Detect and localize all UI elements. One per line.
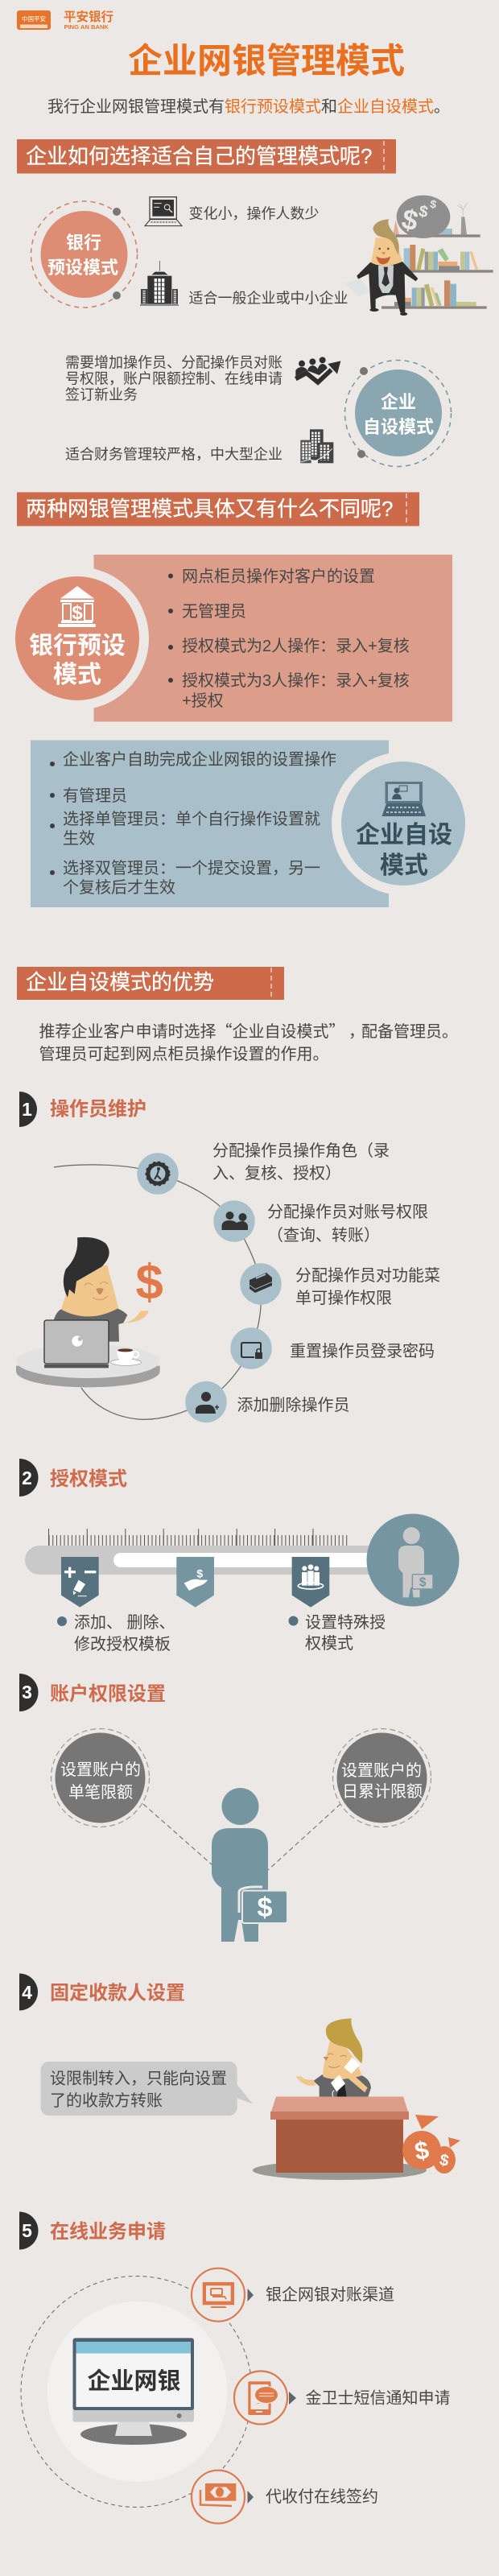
icon: person in circle: $ xyxy=(419,1575,427,1589)
service: collection and payment signing: 代收付在线签约 xyxy=(266,2487,378,2506)
icon: person with briefcase: $ xyxy=(258,1893,273,1923)
heading 3: account limits: 账户权限设置 xyxy=(50,1683,166,1705)
label: bank preset xyxy=(29,633,126,688)
list: bank preset features: +授权 xyxy=(182,691,224,710)
label: bank preset: 银行预设 xyxy=(29,633,126,659)
service: SMS notification xyxy=(234,2372,451,2425)
icon: office tower xyxy=(140,261,179,305)
list: bank preset features xyxy=(168,567,410,710)
step: assign roles: 分配操作员操作角色（录 xyxy=(212,1141,390,1160)
logo: Ping An Bank: PING AN BANK xyxy=(64,23,109,31)
text: manage more operators: 签订新业务 xyxy=(65,386,138,402)
text: special authorization xyxy=(288,1613,386,1653)
shield: hand with money: $ xyxy=(196,1567,203,1579)
text: recommendation: ， xyxy=(348,1023,365,1041)
banner: differences xyxy=(17,493,419,526)
text: special authorization: 权模式 xyxy=(305,1634,353,1653)
panel: bank preset mode xyxy=(0,555,452,722)
subtitle: 我行企业网银管理模式有银行预设模式和企业自设模式。 xyxy=(47,97,450,116)
icon: bank building xyxy=(58,586,96,627)
light circle xyxy=(47,2301,227,2482)
service: SMS notification: 金卫士短信通知申请 xyxy=(306,2389,451,2407)
panel: corporate self-set badge xyxy=(344,361,451,467)
text: strict finance: 适合财务管理较严格，中大型企业 xyxy=(65,446,282,462)
shield: edit template xyxy=(61,1557,99,1608)
list: corporate features: 个复核后才生效 xyxy=(63,878,175,897)
icon: team and rising arrow xyxy=(295,357,340,382)
bubble: single limit xyxy=(52,1729,150,1827)
heading 2: authorization mode: 2 xyxy=(22,1468,32,1488)
heading 1: operator maintenance: 1 xyxy=(22,1099,32,1120)
step: menu permissions: 分配操作员对功能菜 xyxy=(295,1266,440,1285)
label: corporate self-set: 企业自设 xyxy=(356,822,452,848)
list: bank preset features: 授权模式为3人操作：录入+复核 xyxy=(182,671,410,690)
step: assign roles xyxy=(137,1141,390,1195)
step: menu permissions xyxy=(240,1263,440,1307)
step: add or delete operators: 添加删除操作员 xyxy=(237,1396,349,1414)
label: bank preset: 模式 xyxy=(53,662,101,688)
banner: differences: 两种网银管理模式具体又有什么不同呢? xyxy=(26,497,393,521)
label: corporate self-set: 模式 xyxy=(380,852,428,879)
text: recommendation: 配备管理员。 xyxy=(361,1022,458,1041)
logo: Ping An Bank: 平安银行 xyxy=(64,10,113,24)
panel: corporate self-set badge: 自设模式 xyxy=(363,417,434,437)
bubble: daily limit: 设置账户的 xyxy=(341,1761,422,1780)
illustration: man with bookshelves xyxy=(344,196,493,316)
text: edit templates: 修改授权模板 xyxy=(74,1635,171,1653)
banner: advantages: 企业自设模式的优势 xyxy=(26,970,214,994)
heading 4: fixed payee: 4 xyxy=(22,1982,32,2003)
bubble: single limit: 设置账户的 xyxy=(60,1761,141,1779)
banner: advantages xyxy=(17,967,284,1000)
text: edit templates: 添加、 删除、 xyxy=(74,1613,175,1632)
heading 4: fixed payee xyxy=(19,1974,185,2011)
panel: corporate self-set mode xyxy=(31,740,499,908)
label: corporate self-set xyxy=(356,822,452,879)
list: bank preset features: 网点柜员操作对客户的设置 xyxy=(182,567,375,586)
illustration: man at laptop: $ xyxy=(136,1254,163,1310)
banner: how to choose: 企业如何选择适合自己的管理模式呢? xyxy=(26,144,372,168)
callout: fixed payee: 了的收款方转账 xyxy=(50,2091,163,2110)
bubble: daily limit xyxy=(333,1729,431,1827)
heading 2: authorization mode: 授权模式 xyxy=(50,1468,127,1490)
service: reconciliation channel: 银企网银对账渠道 xyxy=(266,2285,394,2304)
step: add or delete operators xyxy=(185,1381,349,1422)
text: recommendation xyxy=(39,1018,458,1063)
icon: computer search xyxy=(145,197,182,226)
illustration: man with bookshelves: $ xyxy=(417,202,430,221)
illustration: man at desk with money bags: $ xyxy=(413,2136,431,2165)
service: reconciliation channel xyxy=(192,2268,394,2322)
curve: operator arc xyxy=(54,1165,261,1419)
logo: Ping An Bank xyxy=(17,10,113,31)
logo: Ping An Bank: 中国平安 xyxy=(22,14,46,23)
panel: corporate self-set badge: 企业 xyxy=(381,392,416,412)
dashed orbit xyxy=(21,2277,252,2507)
text: small change: 变化小，操作人数少 xyxy=(188,206,319,222)
heading 1: operator maintenance xyxy=(19,1092,146,1127)
banner: how to choose xyxy=(17,139,396,174)
step: account permissions: 分配操作员对账号权限 xyxy=(267,1203,428,1221)
shield: hand with money xyxy=(176,1557,214,1608)
service: collection and payment signing xyxy=(192,2471,378,2524)
panel: bank preset badge: 银行 xyxy=(66,233,101,253)
list: bank preset features: 无管理员 xyxy=(182,602,246,621)
step: reset password xyxy=(230,1327,435,1369)
illustration: man at laptop xyxy=(16,1237,163,1387)
illustration: man at desk with money bags xyxy=(253,2018,460,2180)
monitor: corporate online banking xyxy=(72,2338,194,2445)
illustration: man with bookshelves: $ xyxy=(429,197,438,211)
panel: bank preset badge: 预设模式 xyxy=(47,258,118,278)
text: small business: 适合一般企业或中小企业 xyxy=(188,290,348,306)
step: menu permissions: 单可操作权限 xyxy=(295,1289,392,1307)
list: corporate features: 选择双管理员：一个提交设置，另一 xyxy=(63,859,320,877)
heading 3: account limits xyxy=(19,1674,166,1711)
step: reset password: 重置操作员登录密码 xyxy=(290,1342,435,1360)
step: account permissions: （查询、转账） xyxy=(267,1226,380,1245)
text: special authorization: 设置特殊授 xyxy=(305,1613,386,1632)
heading 2: authorization mode xyxy=(19,1459,127,1496)
text: manage more operators xyxy=(65,354,282,402)
heading 5: online applications: 5 xyxy=(22,2220,32,2241)
text: recommendation: 管理员可起到网点柜员操作设置的作用。 xyxy=(39,1045,328,1063)
title: 企业网银管理模式 xyxy=(128,42,405,80)
heading 5: online applications xyxy=(19,2212,166,2249)
monitor: corporate online banking: 企业网银 xyxy=(87,2368,181,2394)
icon: person with briefcase xyxy=(212,1788,287,1942)
panel: bank preset badge xyxy=(31,201,137,308)
illustration: man at desk with money bags: $ xyxy=(438,2151,451,2170)
list: corporate features: 生效 xyxy=(63,829,95,848)
heading 4: fixed payee: 固定收款人设置 xyxy=(50,1982,185,2004)
heading 5: online applications: 在线业务申请 xyxy=(50,2221,166,2243)
bubble: daily limit: 日累计限额 xyxy=(342,1782,423,1801)
text: manage more operators: 需要增加操作员、分配操作员对账 xyxy=(65,354,282,370)
shield: group of people xyxy=(292,1557,329,1608)
step: account permissions xyxy=(213,1200,428,1245)
step: assign roles: 入、复核、授权） xyxy=(212,1164,341,1183)
text: edit templates xyxy=(57,1613,175,1653)
icon: laptop with call xyxy=(381,782,426,816)
chart: authorization ruler xyxy=(25,1529,387,1575)
callout: fixed payee: 设限制转入，只能向设置 xyxy=(50,2069,227,2088)
bubble: single limit: 单笔限额 xyxy=(68,1783,133,1802)
illustration: man with bookshelves: $ xyxy=(399,203,421,237)
heading 1: operator maintenance: 操作员维护 xyxy=(50,1098,146,1121)
icon: city buildings xyxy=(300,429,333,463)
list: corporate features: 有管理员 xyxy=(63,786,127,805)
list: corporate features: 企业客户自助完成企业网银的设置操作 xyxy=(63,750,336,769)
list: corporate features: 选择单管理员：单个自行操作设置就 xyxy=(63,810,320,828)
heading 3: account limits: 3 xyxy=(22,1682,32,1703)
connector lines xyxy=(143,1804,340,1870)
callout: fixed payee xyxy=(41,2062,253,2116)
list: bank preset features: 授权模式为2人操作：录入+复核 xyxy=(182,637,410,655)
list: corporate features xyxy=(50,750,336,897)
text: recommendation: 推荐企业客户申请时选择“企业自设模式” xyxy=(39,1018,344,1042)
icon: person in circle xyxy=(367,1513,459,1607)
text: manage more operators: 号权限，账户限额控制、在线申请 xyxy=(65,370,282,386)
icon: bank building: $ xyxy=(72,602,83,624)
